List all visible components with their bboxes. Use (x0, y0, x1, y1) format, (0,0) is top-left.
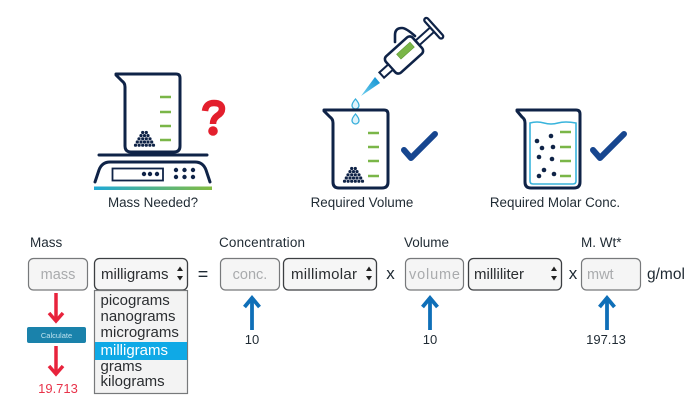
dropdown list: mass units: kilograms (100, 373, 165, 390)
molecular weight value: 197.13 (586, 332, 626, 347)
pipette tip (361, 77, 380, 96)
beaker on balance (116, 74, 180, 152)
dropdown list: mass units: milligrams (100, 342, 168, 359)
select: volume unit (468, 258, 562, 290)
concentration value: 10 (245, 332, 259, 347)
caption: required volume: Required Volume (311, 195, 413, 210)
pipette body (374, 20, 441, 83)
beaker graduations (368, 133, 379, 176)
caption: mass needed: Mass Needed? (108, 195, 198, 210)
icon: pipette dispensing into beaker (324, 20, 441, 188)
multiply sign: x (569, 264, 578, 283)
caption: required molar concentration: Required Molar Conc. (490, 195, 620, 210)
input: molecular weight (582, 258, 640, 290)
dropdown list: mass units: grams (100, 358, 142, 375)
beaker graduations (160, 97, 171, 140)
heading: volume: Volume (404, 235, 449, 250)
input: mass: mass (41, 267, 75, 283)
icon: beaker with solution (517, 110, 624, 188)
arrow: calculate to result (49, 346, 63, 374)
multiply sign: x (386, 264, 395, 283)
input: mass (28, 258, 88, 290)
display dots (142, 172, 159, 176)
balance body (95, 162, 210, 182)
arrow: molecular weight input (600, 298, 614, 330)
select: mass unit (94, 258, 188, 290)
dropdown list: mass units: picograms (100, 292, 170, 309)
highlighted option (95, 342, 187, 360)
dropdown list: mass units: nanograms (100, 308, 176, 325)
icon: red question mark (205, 103, 222, 136)
input: volume (406, 258, 464, 290)
button: calculate: Calculate (41, 331, 72, 340)
button: calculate (27, 327, 86, 343)
heading: concentration: Concentration (219, 235, 305, 250)
input: concentration: conc. (233, 267, 267, 283)
balance pan (99, 154, 207, 156)
beaker graduations (560, 132, 571, 176)
arrow: mass to calculate (49, 293, 63, 321)
droplets (352, 99, 359, 109)
solution (530, 122, 576, 184)
icon: beaker on balance with question mark (94, 74, 222, 190)
select: concentration unit (284, 258, 376, 290)
heading: molecular weight: M. Wt* (581, 235, 622, 250)
pipette hook (395, 28, 415, 42)
balance buttons (174, 168, 195, 179)
arrow: concentration input (244, 298, 260, 330)
powder pile (343, 167, 364, 183)
dropdown list: mass units: micrograms (100, 324, 179, 341)
dissolved particles (535, 134, 556, 178)
select: mass unit: milligrams (101, 266, 168, 283)
check mark (593, 134, 624, 158)
input: volume: volume (409, 267, 460, 283)
check mark (404, 134, 435, 158)
input: concentration (220, 258, 280, 290)
beaker (324, 110, 388, 188)
powder pile (134, 131, 155, 147)
equals sign: = (198, 264, 208, 284)
select: concentration unit: millimolar (291, 266, 357, 283)
volume value: 10 (423, 332, 437, 347)
input: molecular weight: mwt (587, 267, 614, 283)
dropdown list: mass units (94, 290, 188, 394)
unit: g/mol: g/mol (647, 266, 685, 283)
arrow: volume input (422, 298, 438, 330)
result value: 19.713 (38, 381, 78, 396)
gradient base bar (94, 186, 212, 190)
select: volume unit: milliliter (474, 266, 524, 283)
balance display (112, 168, 163, 180)
heading: mass: Mass (30, 235, 63, 250)
beaker (517, 110, 580, 188)
